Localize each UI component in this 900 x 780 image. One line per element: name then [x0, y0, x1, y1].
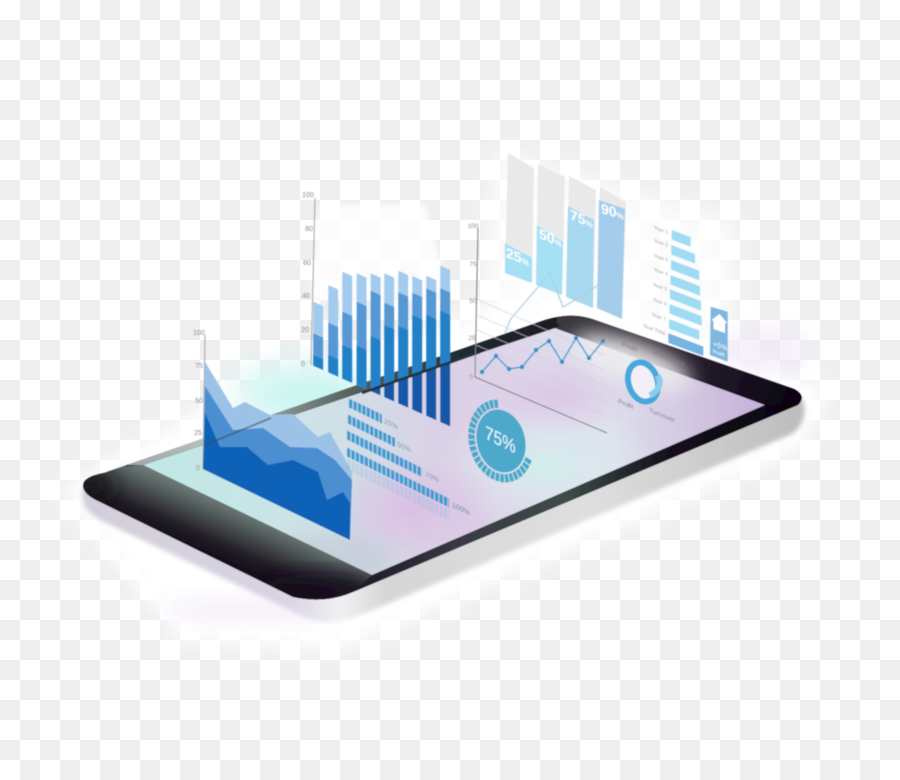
percent panels: [505, 153, 626, 319]
line chart axis labels: [468, 223, 479, 381]
bar series: [312, 265, 452, 427]
bar chart axis labels: 80: [305, 226, 313, 233]
house badge: Profit: [713, 349, 725, 359]
area chart axis: [203, 335, 205, 469]
area layer: light: [203, 362, 352, 540]
bar chart axis labels: 60: [303, 260, 311, 267]
year labels: Year Total: [643, 323, 665, 337]
year labels: [643, 225, 668, 337]
panel 75%: 75%: [570, 207, 593, 232]
area layer: mid: [203, 386, 352, 540]
area chart axis labels: [193, 330, 205, 472]
faint reflected line chart: [482, 273, 603, 372]
line series points: [480, 336, 605, 374]
area chart axis labels: 25: [194, 430, 202, 437]
progress bar 70%: 70%: [425, 469, 439, 485]
donut labels: Profit: [618, 398, 633, 411]
area chart: [193, 330, 352, 540]
donut labels: Turnover: [649, 407, 675, 425]
panel 90%: [597, 187, 626, 319]
area layer: dark: [203, 413, 350, 540]
line chart axis labels: 0: [469, 374, 473, 381]
bar chart: [300, 192, 481, 427]
area chart axis labels: 75: [195, 363, 203, 370]
bar chart axis labels: 20: [301, 327, 309, 334]
icon: house: [712, 314, 727, 333]
year labels: Year 3: [654, 253, 668, 264]
area chart axis labels: 50: [195, 398, 203, 405]
bar chart axis labels: 100: [302, 192, 314, 199]
donut ring: [623, 358, 663, 406]
donut chart: [618, 341, 685, 425]
donut labels: Investment: [653, 349, 685, 369]
gauge 75%: [463, 399, 532, 485]
bar chart axis labels: 0: [301, 361, 305, 368]
house badge: +5%: [713, 340, 728, 353]
phone silver body: [82, 398, 804, 622]
area chart axis labels: 0: [196, 465, 200, 472]
year labels: Year 6: [653, 297, 667, 308]
panel 75%: [566, 176, 596, 308]
line series: [482, 338, 603, 372]
bar chart axis labels: 40: [302, 293, 310, 300]
line chart axis labels: 75: [469, 261, 477, 268]
bezel light fade: [567, 322, 697, 402]
panel 50%: 50%: [539, 226, 562, 251]
progress bar 50%: 50%: [397, 439, 411, 455]
bezel line crossing area chart: [205, 418, 271, 445]
bezel line crossing bars: [362, 352, 480, 393]
phone black bezel: [82, 314, 802, 600]
darker bar bases over screen: [372, 364, 450, 426]
white and coloured glow around phone: [60, 150, 830, 650]
year labels: Year 5: [653, 282, 667, 293]
donut labels: Profit: [622, 341, 637, 354]
gauge segmented ring: [463, 399, 532, 485]
line chart axes: [475, 228, 607, 433]
house badge: [710, 307, 728, 362]
progress bar 100%: 100%: [452, 500, 470, 517]
bar chart axis: [311, 198, 315, 365]
panel 90%: 90%: [601, 201, 624, 224]
gauge value: 75%: [485, 422, 516, 458]
year labels: Year 4: [654, 267, 668, 278]
area chart axis labels: 100: [193, 330, 205, 337]
line chart: [468, 223, 607, 433]
progress bar 25%: 25%: [384, 416, 398, 432]
phone screen: [143, 328, 765, 585]
progress bar reflection: [347, 464, 449, 515]
line chart axis labels: 50: [469, 298, 477, 305]
year labels: Year 2: [654, 238, 668, 249]
panel 25%: [505, 153, 534, 283]
donut labels: [618, 341, 685, 425]
gauge disc: [470, 404, 532, 478]
year labels: Year 1: [654, 225, 668, 236]
segmented progress bars: [347, 403, 470, 517]
line chart grid stripes: [476, 300, 606, 416]
bar chart axis labels: [301, 192, 314, 368]
line chart axis labels: 25: [468, 335, 476, 342]
horizontal year bars: [643, 225, 703, 356]
panel 50%: [536, 164, 565, 295]
phone: [70, 300, 820, 622]
panel 25%: 25%: [506, 245, 529, 270]
donut light segment: [650, 375, 661, 397]
line chart axis labels: 100: [468, 223, 479, 230]
year labels: Year 7: [652, 312, 666, 323]
